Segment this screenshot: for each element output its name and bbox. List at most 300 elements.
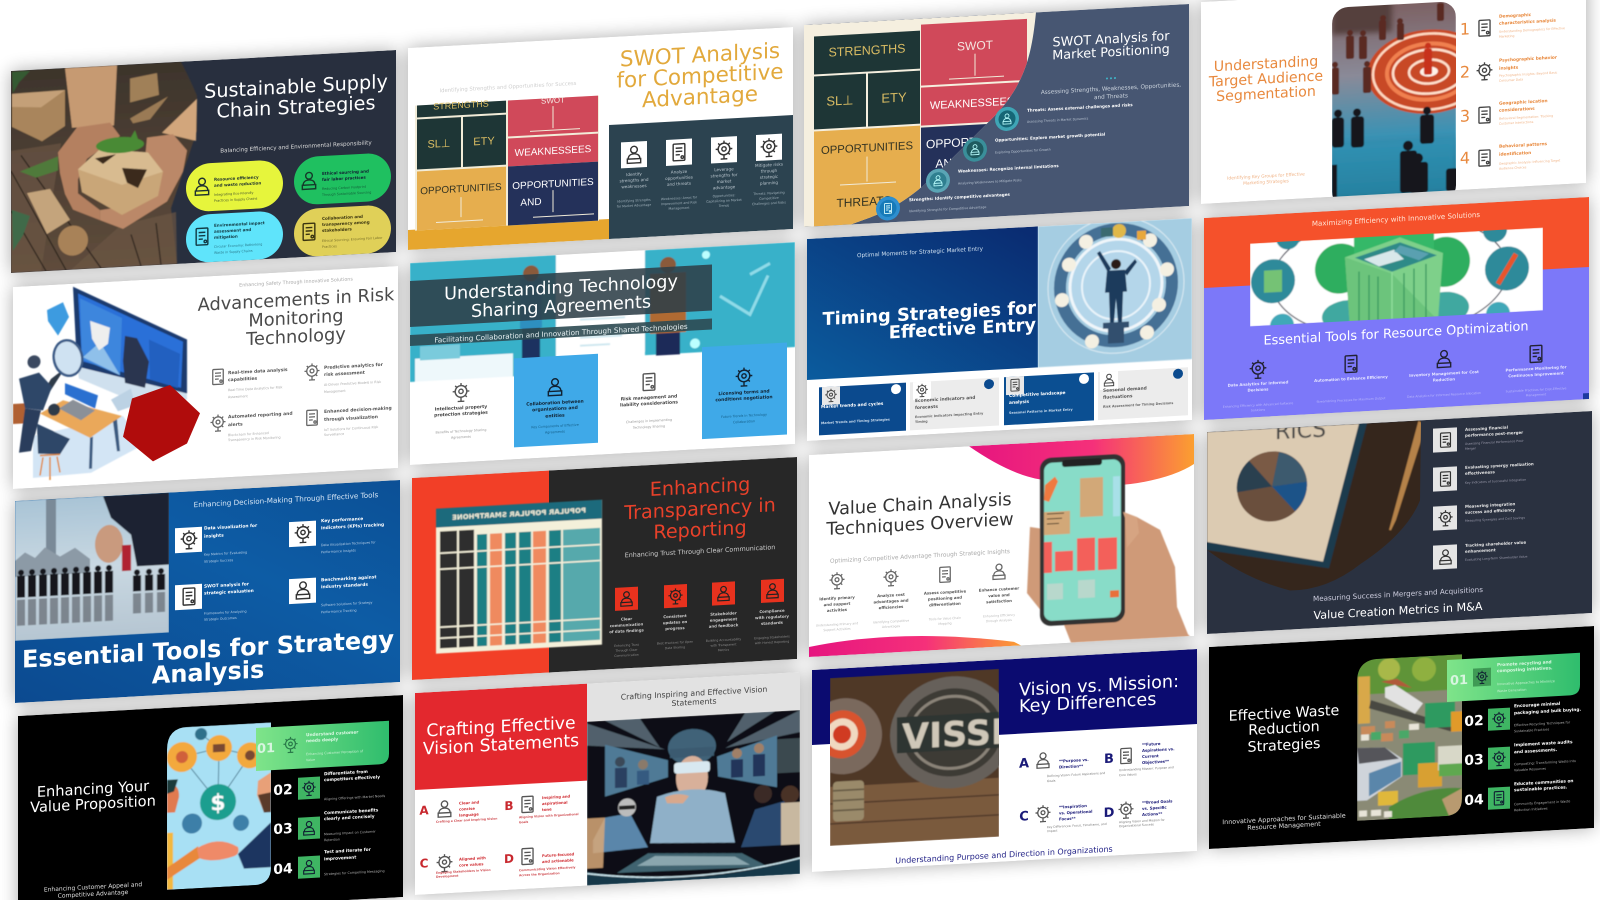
illustration: value network: $ [210,791,226,817]
item A: Clear and [459,799,480,806]
subtitle: Identifying Key Groups for Effective [1227,171,1305,182]
banner [410,265,712,327]
pill: collaboration: Practices [322,244,337,249]
card 01: composting initiatives. [1497,665,1553,674]
item: identify primary [816,571,858,633]
item: collaboration: entities [545,413,565,420]
item: collaboration: organizations and [532,405,578,413]
step: strengths: Identifying Strengths for Competitive Advantage [909,205,986,213]
row 03: Communicate benefits [324,807,379,816]
item: analyze: and threats [667,181,691,187]
item B: aspirational [542,800,568,806]
heading: Value Proposition [30,792,156,816]
item: enhance customer value: Enhance customer [979,586,1019,593]
item: automated: Blockchain for Enhanced [228,431,269,437]
row 04: improvement [324,855,356,862]
item: mitigate: Mitigate risks [755,162,783,168]
step: strengths [876,194,1010,220]
panel: Value Creation Metrics in M&A [1207,403,1592,634]
photo: woman at holographic table [587,710,800,886]
item B [504,793,579,825]
pill: resource efficiency [186,159,283,212]
heading: Vision Statements [423,731,579,760]
item: clear communication [609,586,644,658]
item 4: Audience Choices [1499,165,1527,171]
row 02: 02 [273,782,293,799]
item: benchmarking: Benchmarking against [321,574,376,583]
item: data visualization [175,523,258,565]
item: stakeholder engagement [706,581,741,653]
SWOT image with curved mask: THREATS [836,193,892,210]
item: clear communication: Enhancing Trust [614,643,640,648]
row 03: Valuable Resources [1514,767,1546,772]
item: analyze cost: Analyze cost [877,592,905,598]
card: seasonal demand: Seasonal demand [1103,385,1147,394]
subtitle: Innovative Approaches for Sustainable [1222,812,1346,826]
row 03 [273,807,379,845]
item: integration [1433,501,1525,531]
item: automated [210,411,293,443]
pill: collaboration: transparency among [322,219,370,227]
item: automated: Transparency in Risk Monitoring [227,435,281,442]
heading: Sharing Agreements [471,292,651,322]
heading: Advantage [642,82,758,113]
item A: Direction** [1059,763,1083,770]
item: inventory: Data Analytics for Informed Resource Allocation [1407,391,1481,399]
subtitle: Measuring Success in Mergers and Acquisitions [1313,585,1483,603]
row 02: Differentiate from [324,769,368,777]
pill: ethical sourcing: Through Sustainable Sourcing [321,190,371,197]
panel: SWOT Analysis for Market Positioning [804,4,1189,227]
gray header [587,672,800,723]
step: opportunities: Exploring Opportunities for Growth [995,148,1051,155]
item: KPIs [289,515,384,556]
item: licensing: conditions negotiation [715,394,773,403]
item C: vs. Operational [1059,809,1093,816]
card 01 [1447,653,1580,702]
item A [419,798,497,825]
item: mitigate: Challenges and Risks [752,200,786,206]
SWOT grid image: SWOT [541,95,565,106]
row 02: packaging and bulk buying. [1514,707,1581,716]
item: leverage: advantage [713,184,736,190]
item: automation [1314,354,1388,404]
item: mitigate [752,133,786,206]
SWOT grid image: SL⊥ [427,138,451,151]
card: economic indicators [910,378,999,430]
card: seasonal demand: fluctuations [1103,393,1133,401]
item C: Impact [1047,829,1058,833]
item B: Core Values [1119,772,1137,777]
item C [1019,802,1107,835]
item: compliance: with Honest Reporting [755,639,789,645]
card 01: Understand customer [306,729,359,738]
SWOT image with curved mask: ETY [881,89,907,106]
row 04 [1464,778,1573,815]
subtitle [1222,812,1346,833]
subtitle: Enhancing Safety Through Innovative Solutions [239,276,353,289]
item C: Focus** [1059,816,1076,822]
item: identify: weaknesses [621,183,647,189]
item C: C [1019,809,1029,825]
pill: resource efficiency: Practices in Supply Chains [214,197,258,203]
item: consistent updates: Data Sharing [665,645,685,650]
heading [198,287,394,345]
item D: Across the Organization [519,871,560,877]
step: strengths: Strengths: Identify competitive advantages [909,192,1010,202]
heading: SWOT Analysis for [1052,29,1170,50]
SWOT image with curved mask: WEAKNESSEES [930,96,1014,112]
item 2 [1461,56,1558,82]
SWOT image with curved mask: SL⊥ [826,92,854,109]
card: economic indicators: Economic Indicators Impacting Entry [915,411,984,419]
item: mitigate: through [761,168,778,174]
item 1: Marketing [1499,34,1514,39]
photo: hands holding a parcel [11,61,197,273]
item: synergy: Key Indicators of Successful Integration [1465,478,1526,485]
item 4 [1460,142,1560,170]
item: compliance: Engaging Stakeholders [754,634,790,640]
item 3: Behavioral Segmentation: Tracking [1499,114,1553,121]
heading: Sustainable Supply [204,70,388,103]
subtitle: Assessing Strengths, Weaknesses, Opportunities, [1041,82,1181,96]
panel: Understanding Technology Sharing Agreements [410,242,795,465]
item: data analytics: Enhancing Efficiency with Advanced Software [1223,401,1293,409]
item: identify primary: Understanding Primary and [816,621,858,628]
red title block [415,684,587,790]
heading [1053,31,1170,60]
item B: Objectives** [1142,759,1169,765]
item: data visualization: Strategic Success [204,558,233,564]
photo: chess figures on glass table [15,493,169,641]
gradient arc bottom [809,630,1021,657]
panel: Essential Tools for Resource Optimization [1204,197,1589,420]
card: competitive landscape: Competitive landscape [1009,390,1066,399]
heading: for Competitive [616,60,784,94]
item: inventory: Reduction [1433,376,1455,383]
item D [504,846,575,878]
item: enhanced decision-making: through visualization [324,414,378,423]
item A: Defining Vision: Future Aspirations and [1047,771,1105,778]
item: synergy [1433,461,1534,492]
item: data analytics: Data Analytics for Informed [1228,379,1289,388]
item: benchmarking: industry standards [321,582,368,590]
item: collaboration: Collaboration between [526,399,584,408]
row 03: Composting: Transforming Waste into [1514,759,1576,766]
item: analyze cost: advantages and [873,598,909,604]
pill: collaboration: Ethical Sourcing: Ensuring Fair Labor [322,236,383,243]
subtitle: Identifying Strengths and Opportunities for Success [440,81,577,94]
subtitle: Maximizing Efficiency with Innovative Solutions [1312,210,1480,228]
item: licensing [715,366,773,425]
item D [1104,798,1173,829]
item 1 [1462,12,1565,38]
heading [205,74,388,118]
item: licensing: Collaboration [733,419,755,424]
item: enhance customer value [979,563,1019,624]
SWOT image with curved mask: SWOT [957,38,994,54]
illustration: value network [166,722,272,893]
red hexagon [123,383,200,463]
heading: Key Differences [1019,690,1156,717]
item: assess positioning: positioning and [928,595,962,602]
item 1: 1 [1460,19,1470,39]
item: stakeholder engagement: with Transparent [711,642,737,648]
row 02: competitors effectively [324,774,380,783]
step: threats [995,103,1132,131]
row 03: 03 [1464,752,1484,769]
item 4: Behavioral patterns [1499,141,1548,150]
item: KPIs: Performance Insights [321,548,356,554]
item: data analytics: Solutions [1251,408,1265,412]
item A: concise [459,806,475,812]
item C: core values [459,861,484,868]
heading [823,298,1036,347]
item D: **Broad Goals [1142,798,1173,805]
item: predictive: risk assessment [324,370,366,378]
item: SWOT analysis: Frameworks for Analyzing [204,609,247,616]
item: collaboration: Key Components of Effective [531,423,579,429]
pill: ethical sourcing: Reducing Carbon Footprint [322,185,367,191]
panel: Vision vs. Mission: Key Differences [806,649,1197,872]
item A: **Purpose vs. [1059,757,1089,764]
subtitle: Marketing Strategies [1243,178,1290,187]
heading [22,625,394,697]
illustration: man at clock ring [1038,213,1192,367]
item: automated: alerts [228,421,243,428]
teal panel [609,115,793,239]
item: compliance: with regulatory [755,613,789,620]
item: consistent updates: Best Practices for Open [657,640,693,646]
item: data visualization: insights [204,533,224,540]
item: risk management: Challenges in Implementing [626,418,672,424]
card 01: needs deeply [306,737,338,744]
item B: Current [1142,753,1159,759]
item: clear communication: of data findings [609,627,644,634]
subtitle: Enhancing Customer Appeal and [44,881,142,894]
item: leverage [706,136,743,209]
row 04: Community Engagement in Waste [1514,799,1570,806]
item: mitigate: Threats: Navigating [752,190,785,196]
subtitle: Optimizing Competitive Advantage Through Strategic Insights [830,549,1010,565]
card 01: Value [306,758,315,762]
item: clear communication: communication [610,621,643,628]
item A: language [459,812,479,818]
heading: Effective Entry [889,315,1036,344]
heading [30,777,156,816]
item 2: 2 [1460,62,1470,82]
heading: Vision vs. Mission: [1019,672,1179,701]
row 02: Encourage minimal [1514,701,1561,709]
item: identify: strengths and [619,177,649,183]
heading: Segmentation [1216,84,1316,105]
heading: Technology [245,324,346,350]
SWOT grid image: OPPORTUNITIES [512,177,594,192]
image: smartphone comparison table: POPULAR POPULAR SMARTPHONE [452,507,586,522]
item B: Aligning Vision with Organizational [519,812,579,819]
row 02 [273,768,386,804]
item: real-time: Real-time data analysis [228,367,288,376]
row 04: Educate communities on [1514,778,1573,787]
item: stakeholder engagement: engagement [710,616,737,623]
card: seasonal demand: Risk Assessment for Timing Decisions [1103,401,1173,409]
item: compliance: standards [761,620,784,626]
item: mitigate: strategic [760,174,779,180]
heading: Advancements in Risk [198,284,395,316]
item 2: Psychographic Insights: Beyond Basic [1499,71,1558,78]
item 2: insights [1499,65,1519,72]
item 2: Psychographic behavior [1499,55,1558,64]
card 01: Promote recycling and [1497,659,1552,668]
heading: Enhancing [650,473,750,501]
item: assess positioning: Mapping [938,621,952,626]
item: financial performance: Assessing Financial Performance Post- [1465,439,1524,446]
pill: environmental impact: Circular Economy: Rethinking [214,242,262,249]
heading: Chain Strategies [217,91,375,123]
pill: environmental impact: assessment and [214,227,251,234]
item: performance: Management [1526,392,1547,397]
item: enhance customer value: value and [988,592,1010,598]
heading: Essential Tools for Resource Optimization [1263,319,1529,349]
item: automated: Automated reporting and [228,411,293,420]
item: enhance customer value: satisfaction [986,598,1012,604]
card: competitive landscape [1004,372,1094,425]
subtitle: Enhancing Trust Through Clear Communication [625,543,775,559]
heading: Market Positioning [1052,42,1170,63]
row 03: Retention [324,837,340,842]
heading: Value Creation Metrics in M&A [1314,600,1483,622]
item: analyze cost [873,568,909,630]
card 01: Enhancing Customer Perception of [306,749,364,756]
step: threats: Assessing Threats in Market Dynamics [1027,116,1089,124]
card: economic indicators: forecasts [915,404,938,411]
item: risk management: Technology Sharing [632,424,665,430]
item: analyze: Weaknesses: Areas for [661,195,698,201]
item: assess positioning [924,566,966,627]
panel: Value Chain Analysis Techniques Overview [809,434,1194,657]
item: identify: Identifying Strengths [617,198,651,204]
item: inventory [1407,349,1481,399]
heading [617,42,782,108]
row 04: Strategies for Compelling Messaging [324,869,385,876]
row 03: Measuring Impact on Customer [324,829,376,836]
item: integration: success and efficiency [1465,507,1515,515]
item: real-time [213,366,288,400]
row 02: 02 [1464,713,1484,730]
card: market trends [819,383,906,435]
SWOT image with curved mask: OPPORTUNITIES [821,140,913,157]
photo: lightbulb and VISSI sign: VISSI [902,712,1004,758]
row 03: Implement waste audits [1514,739,1573,748]
heading: Understanding Technology [444,272,678,305]
corner marker [1583,393,1589,399]
item D: Organizational Success [1119,822,1154,828]
item: SWOT analysis: strategic evaluation [204,588,254,597]
item: shareholder value: enhancement [1465,547,1496,554]
item: intellectual property: Agreements [451,435,471,440]
card: competitive landscape: analysis [1009,399,1030,406]
SWOT grid image: WEAKNESSEES [515,144,592,159]
navy band [812,649,1197,745]
item: SWOT analysis [175,581,254,623]
item: financial performance: Assessing financial [1465,425,1509,432]
item: identify: for Market Advantage [617,203,651,209]
subtitle: Balancing Efficiency and Environmental Responsibility [220,140,372,155]
row 04: Reduction Initiatives [1514,807,1548,812]
pill: collaboration: stakeholders [322,226,352,233]
item C: **Inspiration [1059,803,1087,810]
item: leverage: Trends [718,203,730,208]
item B: Aspirations vs. [1142,746,1175,753]
item: assess positioning: Assess competitive [924,588,966,596]
item D: Actions** [1142,811,1162,817]
item: data analytics [1223,358,1293,414]
pill: ethical sourcing: Ethical sourcing and [322,168,369,176]
pill: collaboration: Collaboration and [322,214,363,221]
heading: Effective Waste [1229,703,1340,725]
item: predictive [304,360,384,395]
item: integration: Measuring integration [1465,501,1515,509]
item C [420,852,491,880]
SWOT grid image [415,93,599,231]
item: enhanced decision-making: Enhanced decision-making [324,405,392,415]
heading: Strategies [1248,736,1320,756]
card: licensing [702,342,787,439]
item: consistent updates: Consistent [663,613,687,619]
item: enhance customer value: Enhancing Efficiency [983,613,1015,619]
item: intellectual property: protection strategies [434,410,488,419]
item C: Engaging Stakeholders in Vision [436,868,491,875]
panel: Advancements in Risk Monitoring Technology [13,266,398,489]
panel: Timing Strategies for Effective Entry [807,213,1192,441]
heading: Monitoring [248,305,344,332]
item: KPIs: Key performance [321,516,363,524]
orange band [408,219,609,250]
item: benchmarking [289,574,376,616]
item: KPIs: Data Visualization Techniques for [321,540,376,547]
heading: Transparency in [623,493,776,524]
item A: A [1019,756,1029,772]
heading [825,490,1014,540]
item: analyze: Analyze [671,169,688,175]
item: analyze: Improvement and Risk [661,200,697,206]
photo: target crowd [1332,2,1456,197]
item: enhance customer value: through Analysis [986,618,1012,623]
step: opportunities [963,131,1106,162]
item: consistent updates [657,584,693,651]
step: opportunities: Opportunities: Explore market growth potential [995,132,1106,143]
item: mitigate: Competitive [759,196,779,201]
pill: collaboration [294,204,391,258]
item 4: 4 [1460,148,1470,168]
heading: Enhancing Your [37,778,149,801]
item 3: 3 [1460,106,1470,126]
item A [1019,750,1105,785]
item: leverage: Opportunities: [713,193,735,198]
heading: Analysis [152,655,264,690]
item D: vs. Specific [1142,805,1167,811]
card 01: 01 [1450,673,1468,689]
item B: Goals [519,820,529,824]
subtitle: Enhancing Decision-Making Through Effective Tools [194,490,379,509]
subtitle: and Threats [1094,93,1128,101]
item: SWOT analysis: Strategic Outcomes [204,616,237,622]
item B: Inspiring and [542,794,571,800]
item 2: Consumer Data [1499,77,1523,83]
dots [1106,77,1116,80]
item C: C [420,856,429,871]
card 01: Innovative Approaches to Minimize [1497,679,1555,686]
